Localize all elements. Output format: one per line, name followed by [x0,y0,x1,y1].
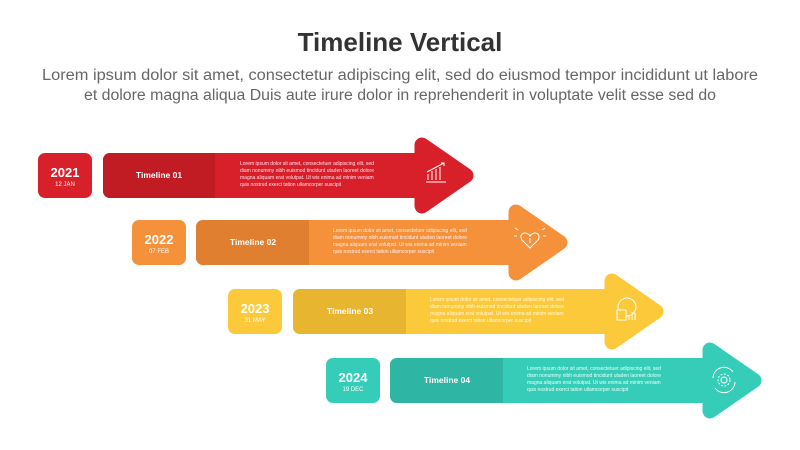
arrow 02: Lorem ipsum dolor sit amet, consectetuer adipiscing elit, sed [333,228,467,234]
subtitle [42,67,758,104]
arrow 04: Timeline 04 [424,375,470,385]
row 3: 2023 [228,281,656,342]
arrow 04: magna aliquam erat volutpat. Ut wis enima ad minim veniam [527,380,661,386]
icon: chart [426,163,446,182]
arrow 03: diam nonummy nibh euismod tincidunt utaden laoreet dolore [430,304,564,310]
arrow 02: quis nostrud exerci tation ullamcorper suscipit [333,249,435,255]
arrow 04 [390,350,754,411]
date box 2022 [132,220,186,265]
title: Timeline Vertical [298,27,502,57]
icon: heart [514,228,546,248]
row 2: 2022 [132,212,560,273]
arrow 04: diam nonummy nibh euismod tincidunt utaden laoreet dolore [527,373,661,379]
arrow 02: Timeline 02 [230,237,276,247]
arrow 04: quis nostrud exerci tation ullamcorper suscipit [527,387,629,393]
date box 2021: 12 JAN [55,182,75,188]
arrow 03 [293,281,656,342]
date box 2024 [326,358,380,403]
arrow 02: magna aliquam erat volutpat. Ut wis enima ad minim veniam [333,242,467,248]
arrow 01: Lorem ipsum dolor sit amet, consectetuer adipiscing elit, sed [240,161,374,167]
arrow 04: Lorem ipsum dolor sit amet, consectetuer adipiscing elit, sed [527,366,661,372]
arrow 03: quis nostrud exerci tation ullamcorper suscipit [430,318,532,324]
date box 2021: 2021 [51,165,79,180]
arrow 02: diam nonummy nibh euismod tincidunt utaden laoreet dolore [333,235,467,241]
date box 2023: 31 MAY [245,318,265,324]
arrow 01: diam nonummy nibh euismod tincidunt utaden laoreet dolore [240,168,374,174]
arrow 03: magna aliquam erat volutpat. Ut wis enima ad minim veniam [430,311,564,317]
row 4: 2024 [326,350,754,411]
arrow 01: quis nostrud exerci tation ullamcorper suscipit [240,182,342,188]
arrow 01 [103,145,466,206]
icon: globe money [617,298,636,320]
date box 2024: 19 DEC [342,387,364,393]
subtitle: Lorem ipsum dolor sit amet, consectetur adipiscing elit, sed do eiusmod tempor incididunt ut labore [42,67,758,84]
date box 2022: 2022 [145,232,173,247]
icon: gear [713,367,735,393]
arrow 01: magna aliquam erat volutpat. Ut wis enima ad minim veniam [240,175,374,181]
date box 2023: 2023 [241,301,269,316]
arrow 02 [196,212,560,273]
subtitle: et dolore magna aliqua Duis aute irure dolor in reprehenderit in voluptate velit esse sed do [84,87,716,104]
date box 2022: 07 FEB [149,249,169,255]
date box 2021 [38,153,92,198]
arrow 03: Lorem ipsum dolor sit amet, consectetuer adipiscing elit, sed [430,297,564,303]
date box 2023 [228,289,282,334]
arrow 03: Timeline 03 [327,306,373,316]
row 1: 2021 [38,145,466,206]
date box 2024: 2024 [339,370,368,385]
arrow 01: Timeline 01 [136,170,182,180]
